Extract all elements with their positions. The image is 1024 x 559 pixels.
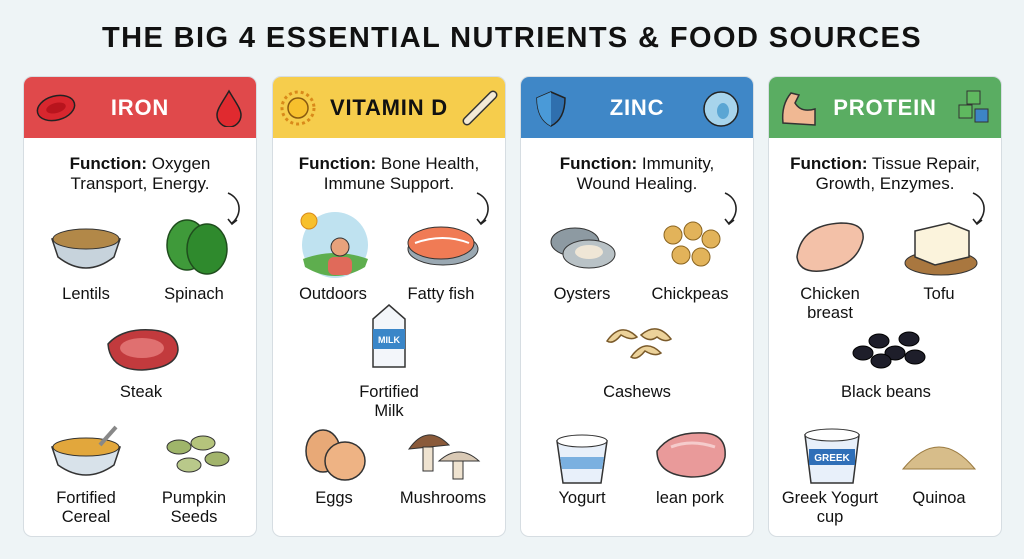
icon: eggs [305, 429, 366, 481]
icon: tofu [904, 222, 978, 276]
function text: Immune Support. [324, 174, 454, 193]
function text: Wound Healing. [577, 174, 697, 193]
function text: Function: Oxygen [70, 154, 210, 173]
function text: Transport, Energy. [71, 174, 209, 193]
panel: vitamin d: Milk [374, 402, 404, 420]
icon: black beans [852, 332, 926, 368]
header: protein: PROTEIN [833, 95, 937, 120]
function text: Function: Immunity, [560, 154, 714, 173]
function text [790, 154, 980, 193]
arrow [476, 192, 489, 226]
panel: zinc: lean pork [656, 489, 724, 507]
icon: steak [107, 329, 179, 371]
panel: iron: Lentils [62, 285, 110, 303]
header: iron: IRON [111, 95, 169, 120]
arrow [228, 192, 240, 226]
panel: iron: Seeds [171, 508, 217, 526]
panel: vitamin d: Mushrooms [400, 489, 486, 507]
header: zinc: ZINC [610, 95, 664, 120]
icon: lean pork [656, 432, 726, 478]
icon: outdoors [300, 212, 368, 278]
panel: iron: Spinach [164, 285, 224, 303]
header: iron [24, 77, 256, 138]
panel: vitamin d [272, 76, 506, 537]
panel: zinc [520, 76, 754, 537]
icon: mushrooms [408, 434, 480, 480]
panel: vitamin d: Outdoors [299, 285, 367, 303]
icon: fortified milk [372, 304, 406, 368]
icon: chickpeas [664, 222, 720, 266]
panel: zinc: Cashews [603, 383, 671, 401]
panel: protein: Quinoa [912, 489, 966, 507]
arrow [972, 192, 985, 226]
header: vitamin d [273, 77, 505, 138]
panel: protein: Greek Yogurt [782, 489, 878, 507]
panel: zinc: Yogurt [558, 489, 606, 507]
panel: iron: Cereal [62, 508, 110, 526]
panel: zinc: Oysters [554, 285, 610, 303]
panel: vitamin d: Eggs [315, 489, 353, 507]
panel: protein [768, 76, 1002, 537]
function text: Function: Bone Health, [299, 154, 479, 173]
header: protein [769, 77, 1001, 138]
panel: protein: Black beans [841, 383, 931, 401]
icon: fortified milk: MILK [378, 335, 400, 345]
function text: Growth, Enzymes. [816, 174, 954, 193]
icon: chicken breast [796, 222, 864, 272]
icon: oysters [550, 228, 616, 268]
panel: iron: Steak [120, 383, 162, 401]
function text [299, 154, 479, 193]
header: vitamin d: VITAMIN D [330, 95, 448, 120]
function text: Function: Tissue Repair, [790, 154, 980, 173]
function text [70, 154, 210, 193]
panel: zinc: Chickpeas [651, 285, 729, 303]
header: zinc [521, 77, 753, 138]
icon: greek yogurt cup: GREEK [814, 453, 851, 464]
icon: spinach [166, 219, 228, 275]
icon: yogurt [556, 434, 608, 484]
panel: protein: breast [807, 304, 853, 322]
icon: greek yogurt cup [804, 428, 860, 484]
panel: protein: Chicken [800, 285, 860, 303]
icon: lentils [51, 228, 121, 269]
icon: fatty fish [408, 226, 478, 266]
icon: fortified cereal [51, 426, 121, 476]
icon: cashews [606, 328, 672, 359]
panel: iron: Pumpkin [162, 489, 226, 507]
panel: vitamin d: Fortified [359, 383, 419, 401]
panel: iron [23, 76, 257, 537]
icon: quinoa [902, 446, 976, 470]
panel: protein: Tofu [923, 285, 955, 303]
panel: iron: Fortified [56, 489, 116, 507]
panel: protein: cup [817, 508, 843, 526]
arrow [724, 192, 737, 226]
title: THE BIG 4 ESSENTIAL NUTRIENTS & FOOD SOURCES [102, 22, 922, 54]
panel: vitamin d: Fatty fish [408, 285, 474, 303]
function text [560, 154, 714, 193]
icon: pumpkin seeds [166, 436, 230, 472]
